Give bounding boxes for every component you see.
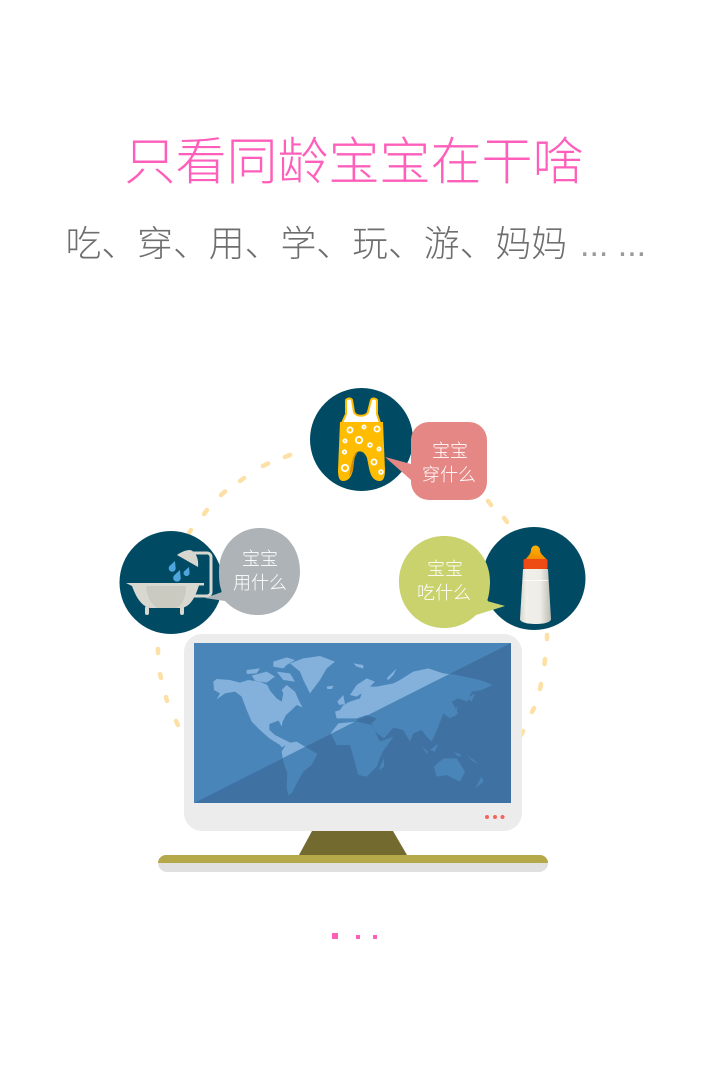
overalls leg shade xyxy=(349,452,358,476)
subtitle: 吃、穿、用、学、玩、游、妈妈 xyxy=(66,224,567,264)
overalls body xyxy=(338,422,385,481)
bathtub xyxy=(126,583,204,608)
monitor xyxy=(158,634,548,872)
shower pipe xyxy=(192,553,211,596)
speech bubble: clothes: 穿什么 xyxy=(422,465,476,485)
speech bubble: clothes: 宝宝 xyxy=(432,441,468,461)
icon: overalls circle xyxy=(310,388,413,491)
speech bubble: use xyxy=(205,528,300,615)
world map light half xyxy=(213,656,449,758)
monitor base xyxy=(158,855,548,872)
overalls dots xyxy=(342,425,383,474)
bottle nipple xyxy=(525,546,547,560)
speech bubble: food: 宝宝 xyxy=(427,559,463,579)
indicator lights xyxy=(485,815,504,819)
icon: bottle circle xyxy=(482,527,586,630)
speech bubble: food xyxy=(399,536,505,628)
speech bubble: food: 吃什么 xyxy=(417,583,471,603)
screen diagonal shade xyxy=(194,643,511,803)
pagination dots xyxy=(332,933,377,939)
monitor body xyxy=(184,634,522,831)
screen xyxy=(194,643,511,803)
icon: bathtub circle xyxy=(120,531,222,634)
overalls bib xyxy=(342,398,380,423)
Mediterranean xyxy=(357,717,374,722)
shower head xyxy=(177,550,198,567)
dotted arc xyxy=(158,455,547,735)
speech bubble: use: 宝宝 xyxy=(242,549,278,569)
speech bubble: clothes xyxy=(385,422,487,500)
title: 只看同龄宝宝在干啥 xyxy=(124,134,584,190)
water drops xyxy=(169,561,190,582)
speech bubble: use: 用什么 xyxy=(233,573,287,593)
subtitle ellipsis: ... ... xyxy=(580,226,646,264)
bottle collar xyxy=(524,559,548,569)
monitor stand neck xyxy=(299,831,407,855)
bottle body xyxy=(520,569,551,624)
world map dark half xyxy=(283,674,492,795)
